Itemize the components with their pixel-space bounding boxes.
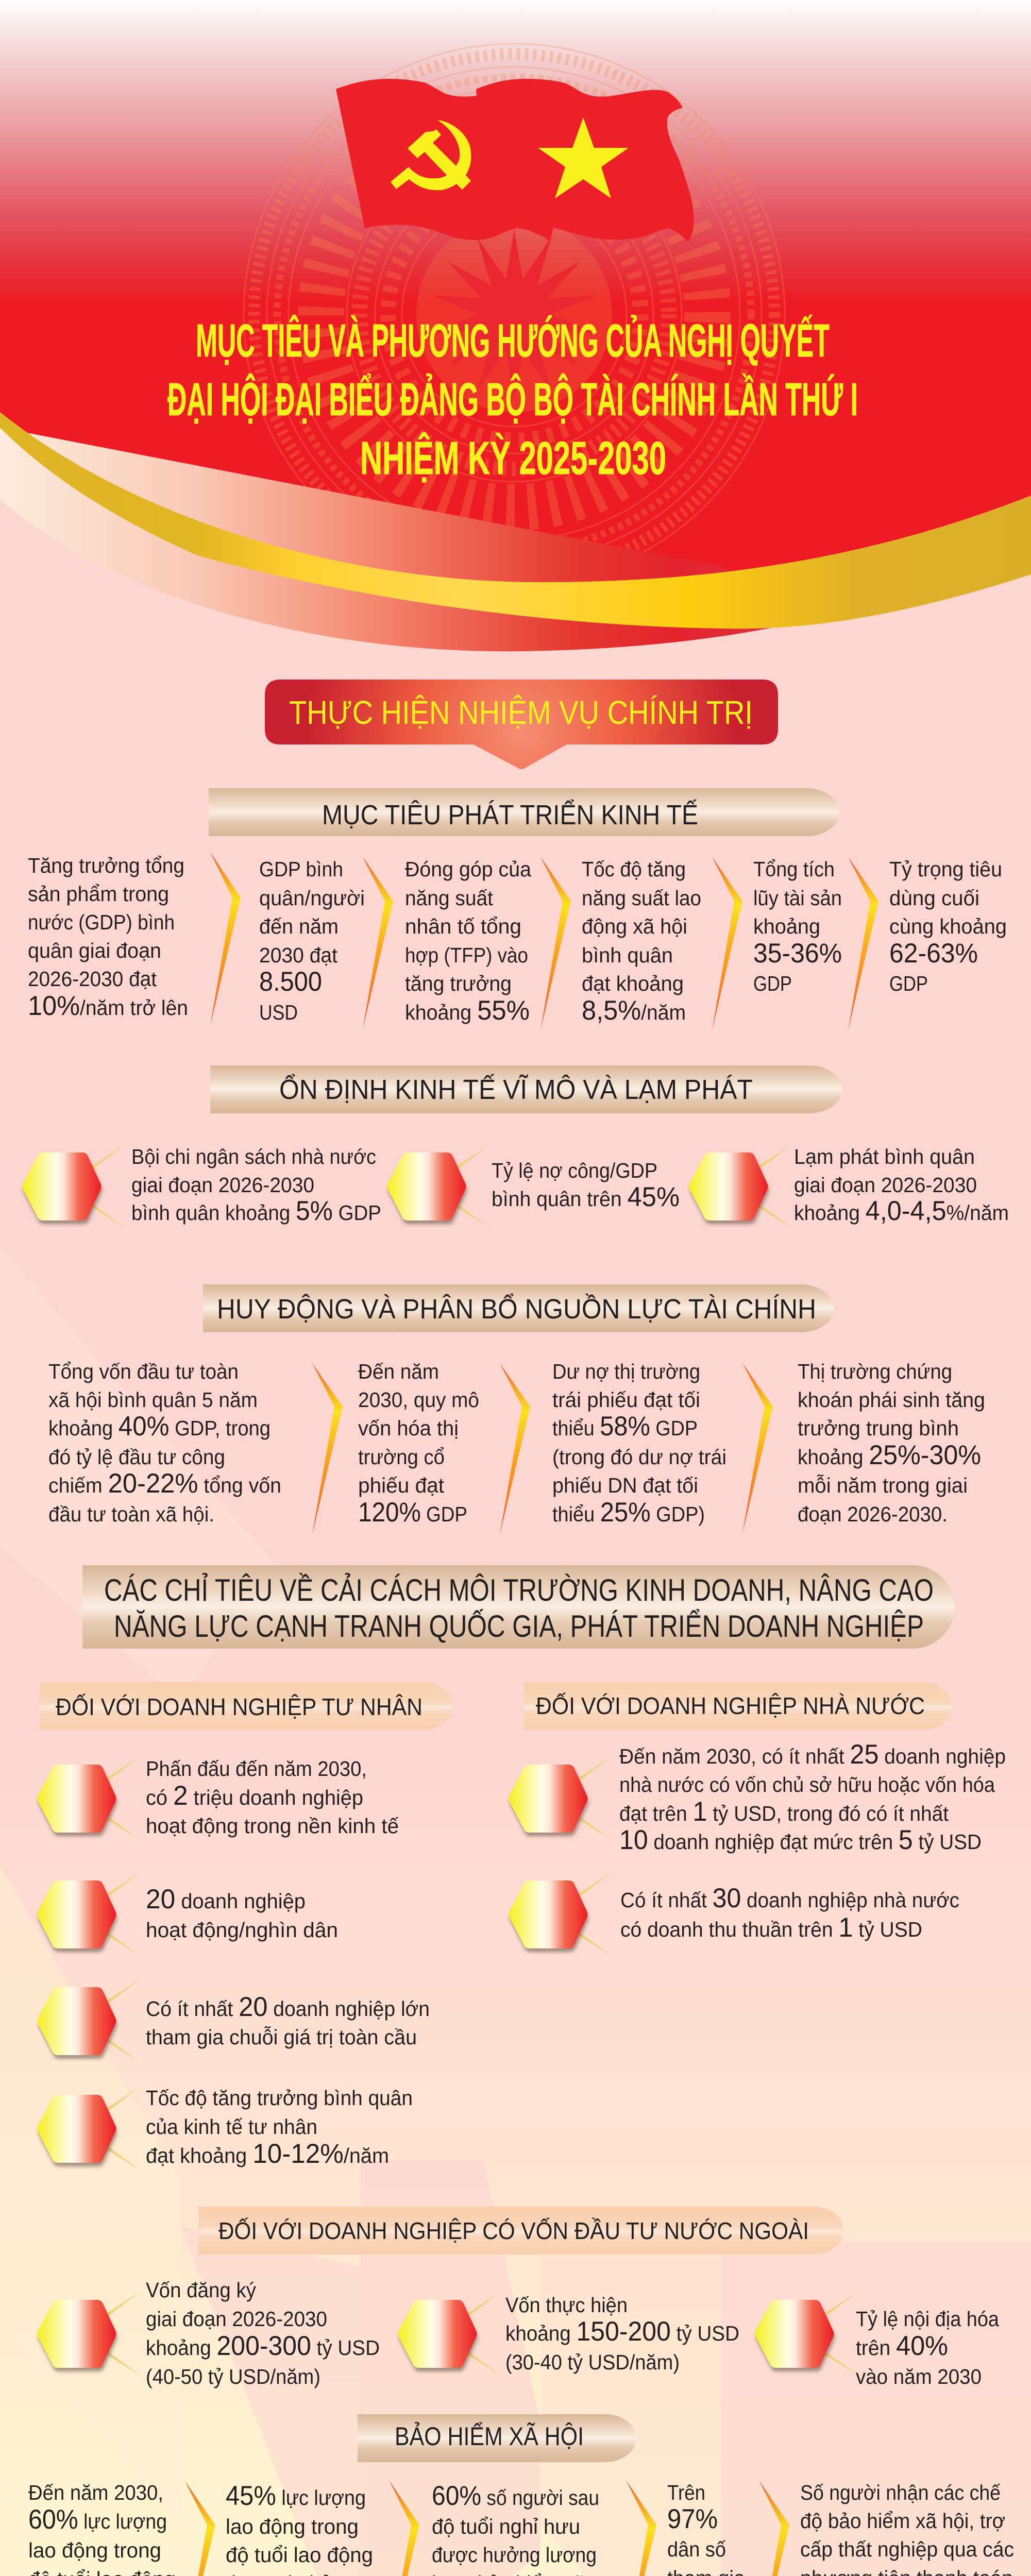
- panel: state enterprises: [509, 1739, 1006, 1956]
- icon: yellow star: [538, 117, 629, 198]
- text: derivatives market: trưởng trung bình: [798, 1416, 959, 1440]
- text: derivatives market: Thị trường chứng: [798, 1360, 952, 1383]
- text: 25 state enterprises: đạt trên 1 tỷ USD, trong đó có ít nhất: [619, 1797, 949, 1827]
- text: total investment: [48, 1360, 281, 1526]
- text: 20 enterprises per thousand: hoạt động/nghìn dân: [146, 1918, 338, 1942]
- text: total investment: đầu tư toàn xã hội.: [48, 1502, 214, 1526]
- text: global value chain: [146, 1992, 430, 2049]
- heading: ổn định kinh tế vĩ mô: [210, 1065, 842, 1113]
- heading: bảo hiểm xã hội: [358, 2414, 636, 2462]
- text: bond market: trái phiếu đạt tối: [552, 1388, 700, 1412]
- icon: hexagon: [23, 1145, 125, 1228]
- panel: private enterprises: [37, 1757, 430, 2170]
- text: GDP per capita: [259, 857, 365, 1024]
- text: stock market cap: 120% GDP: [358, 1497, 467, 1528]
- text: global value chain: tham gia chuỗi giá trị toàn cầu: [146, 2025, 417, 2049]
- text: GDP per capita: 2030 đạt: [259, 943, 338, 967]
- arrow: chevron: [500, 1363, 530, 1535]
- text: unemployment insurance: độ tuổi lao động: [226, 2543, 373, 2567]
- text: private growth rate: [146, 2086, 413, 2169]
- text: cashless payments: độ bảo hiểm xã hội, trợ: [800, 2509, 1005, 2533]
- text: 2 million enterprises: Phấn đấu đến năm 2030,: [146, 1757, 367, 1781]
- text: cashless payments: [800, 2481, 1016, 2576]
- text: final consumption: dùng cuối: [889, 886, 979, 910]
- text: budget deficit: Bội chi ngân sách nhà nước: [131, 1145, 376, 1168]
- text: pension: được hưởng lương: [432, 2543, 597, 2567]
- text: asset accumulation: GDP: [753, 972, 792, 995]
- text: registered capital: (40-50 tỷ USD/năm): [146, 2365, 320, 2388]
- text: cashless payments: cấp thất nghiệp qua các: [800, 2537, 1014, 2561]
- heading: thực hiện nhiệm vụ chính trị: THỰC HIỆN NHIỆM VỤ CHÍNH TRỊ: [289, 694, 753, 731]
- arrow: chevron: [626, 2480, 656, 2576]
- text: localisation rate: vào năm 2030: [856, 2365, 982, 2388]
- text: bond market: phiếu DN đạt tối: [552, 1473, 698, 1497]
- text: GDP per capita: 8.500: [259, 967, 322, 997]
- text: public debt: Tỷ lệ nợ công/GDP: [492, 1159, 657, 1182]
- text: stock market cap: Đến năm: [358, 1360, 439, 1383]
- text: GDP per capita: GDP bình: [259, 857, 343, 881]
- text: health insurance: [667, 2481, 751, 2576]
- text: implemented capital: [505, 2293, 739, 2374]
- heading: thực hiện nhiệm vụ chính trị: [265, 680, 778, 769]
- text: TFP: Đóng góp của: [405, 857, 531, 881]
- heading: đối với doanh nghiệp tư nhân: ĐỐI VỚI DOANH NGHIỆP TƯ NHÂN: [56, 1693, 422, 1720]
- text: private growth rate: Tốc độ tăng trưởng bình quân: [146, 2086, 413, 2110]
- text: inflation: Lạm phát bình quân: [794, 1145, 975, 1168]
- text: labour productivity: động xã hội: [582, 914, 687, 938]
- text: total investment: khoảng 40% GDP, trong: [48, 1411, 271, 1442]
- text: 2 million enterprises: có 2 triệu doanh nghiệp: [146, 1781, 363, 1811]
- text: registered capital: khoảng 200-300 tỷ USD: [146, 2331, 380, 2361]
- text: TFP: khoảng 55%: [405, 995, 530, 1026]
- text: total investment: xã hội bình quân 5 năm: [48, 1388, 258, 1412]
- text: localisation rate: [856, 2307, 999, 2388]
- panel: financial resources: [48, 1360, 985, 1535]
- text: pension: [432, 2481, 615, 2576]
- text: inflation: giai đoạn 2026-2030: [794, 1173, 977, 1197]
- text: 60 percent social insurance: Đến năm 2030,: [28, 2481, 163, 2504]
- text: 25 state enterprises: Đến năm 2030, có ít nhất 25 doanh nghiệp: [619, 1739, 1006, 1770]
- heading: bảo hiểm xã hội: BẢO HIỂM XÃ HỘI: [395, 2422, 584, 2451]
- icon: hexagon: [37, 2087, 140, 2170]
- text: cashless payments: Số người nhận các chế: [800, 2481, 1001, 2504]
- arrow: chevron: [848, 857, 878, 1030]
- text: 60 percent social insurance: 60% lực lượng: [28, 2504, 167, 2535]
- arrow: chevron: [742, 1363, 773, 1533]
- text: GDP growth: nước (GDP) bình: [28, 910, 175, 934]
- arrow: chevron: [712, 857, 742, 1030]
- text: implemented capital: Vốn thực hiện: [505, 2293, 628, 2317]
- icon: hexagon: [387, 1145, 489, 1228]
- text: stock market cap: trường cổ: [358, 1445, 445, 1469]
- icon: hexagon: [509, 1757, 611, 1840]
- heading: mục tiêu phát triển kinh tế: MỤC TIÊU PHÁT TRIỂN KINH TẾ: [322, 800, 698, 831]
- text: asset accumulation: [753, 857, 842, 995]
- icon: hexagon: [755, 2292, 857, 2375]
- text: GDP per capita: USD: [259, 1001, 298, 1024]
- text: stock market cap: 2030, quy mô: [358, 1388, 479, 1412]
- text: bond market: (trong đó dư nợ trái: [552, 1445, 726, 1469]
- text: private growth rate: đạt khoảng 10-12%/năm: [146, 2139, 389, 2169]
- text: 25 state enterprises: nhà nước có vốn chủ sở hữu hoặc vốn hóa: [619, 1773, 995, 1797]
- arrow: chevron: [312, 1363, 343, 1535]
- text: final consumption: cùng khoảng: [889, 914, 1007, 938]
- arrow: chevron: [759, 2480, 789, 2576]
- text: total investment: Tổng vốn đầu tư toàn: [48, 1360, 239, 1383]
- text: stock market cap: phiếu đạt: [358, 1473, 445, 1497]
- text: total investment: chiếm 20-22% tổng vốn: [48, 1468, 281, 1499]
- text: GDP growth: sản phẩm trong: [28, 882, 169, 906]
- heading: mục tiêu phát triển kinh tế: [209, 788, 840, 836]
- text: unemployment insurance: 45% lực lượng: [226, 2481, 366, 2511]
- banner background with red gradient: [0, 0, 1031, 582]
- text: GDP per capita: đến năm: [259, 914, 339, 938]
- text: labour productivity: năng suất lao: [582, 886, 701, 910]
- icon: hexagon: [37, 1873, 140, 1956]
- text: budget deficit: giai đoạn 2026-2030: [131, 1173, 314, 1197]
- text: asset accumulation: Tổng tích: [753, 857, 835, 881]
- arrow: chevron: [210, 852, 241, 1026]
- text: 2 million enterprises: hoạt động trong nền kinh tế: [146, 1814, 399, 1838]
- text: labour productivity: [582, 857, 701, 1026]
- text: health insurance: Trên: [667, 2481, 705, 2504]
- lower ribbon: [0, 428, 824, 651]
- text: global value chain: Có ít nhất 20 doanh nghiệp lớn: [146, 1992, 430, 2022]
- text: budget deficit: bình quân khoảng 5% GDP: [131, 1196, 381, 1226]
- icon: party flag: [336, 79, 694, 242]
- text: total investment: đó tỷ lệ đầu tư công: [48, 1445, 225, 1469]
- text: asset accumulation: khoảng: [753, 914, 820, 938]
- panel: foreign invested enterprises: [37, 2278, 999, 2388]
- text: GDP growth: 2026-2030 đạt: [28, 967, 157, 991]
- text: pension: 60% số người sau: [432, 2481, 599, 2511]
- text: public debt: bình quân trên 45%: [492, 1182, 680, 1212]
- arrow: chevron: [363, 857, 393, 1029]
- text: TFP: năng suất: [405, 886, 494, 910]
- text: TFP: nhân tố tổng: [405, 914, 521, 938]
- text: GDP growth: Tăng trưởng tổng: [28, 854, 184, 877]
- text: budget deficit: [131, 1145, 381, 1226]
- text: bond market: [552, 1360, 726, 1528]
- text: registered capital: giai đoạn 2026-2030: [146, 2307, 327, 2331]
- text: stock market cap: vốn hóa thị: [358, 1416, 459, 1440]
- text: 25 state enterprises: [619, 1739, 1006, 1855]
- text: labour productivity: bình quân: [582, 943, 673, 967]
- heading: doanh nghiệp có vốn đầu tư nước ngoài: [198, 2207, 844, 2255]
- text: 30 state enterprises: có doanh thu thuần trên 1 tỷ USD: [620, 1912, 922, 1943]
- text: 2 million enterprises: [146, 1757, 399, 1838]
- text: implemented capital: (30-40 tỷ USD/năm): [505, 2350, 680, 2374]
- icon: hexagon: [37, 2292, 140, 2375]
- text: TFP: tăng trưởng: [405, 972, 512, 995]
- text: unemployment insurance: lao động trong: [226, 2515, 359, 2538]
- arrow: chevron: [389, 2480, 419, 2576]
- text: GDP growth: [28, 854, 188, 1021]
- panel: macro stability: [23, 1145, 1009, 1228]
- text: derivatives market: mỗi năm trong giai: [798, 1473, 968, 1497]
- text: derivatives market: đoạn 2026-2030.: [798, 1502, 948, 1526]
- text: final consumption: Tỷ trọng tiêu: [889, 857, 1002, 881]
- arrow: chevron: [185, 2481, 215, 2576]
- text: asset accumulation: 35-36%: [753, 938, 842, 969]
- text: 30 state enterprises: [620, 1883, 959, 1943]
- text: 20 enterprises per thousand: 20 doanh nghiệp: [146, 1884, 306, 1914]
- text: registered capital: [146, 2278, 380, 2388]
- icon: hexagon: [398, 2292, 500, 2375]
- icon: hexagon: [689, 1145, 791, 1228]
- text: GDP growth: quân giai đoạn: [28, 939, 161, 962]
- text: health insurance: dân số: [667, 2537, 726, 2561]
- text: 60 percent social insurance: lao động trong: [28, 2538, 161, 2562]
- text: registered capital: Vốn đăng ký: [146, 2278, 256, 2302]
- text: 20 enterprises per thousand: [146, 1884, 338, 1942]
- text: pension: độ tuổi nghỉ hưu: [432, 2515, 580, 2538]
- text: bond market: thiểu 25% GDP): [552, 1497, 705, 1528]
- text: final consumption: [889, 857, 1007, 995]
- text: final consumption: 62-63%: [889, 938, 978, 969]
- text: stock market cap: [358, 1360, 479, 1528]
- heading: đối với doanh nghiệp nhà nước: ĐỐI VỚI DOANH NGHIỆP NHÀ NƯỚC: [536, 1692, 925, 1719]
- text: public debt: [492, 1159, 680, 1212]
- text: labour productivity: Tốc độ tăng: [582, 857, 686, 881]
- text: 30 state enterprises: Có ít nhất 30 doanh nghiệp nhà nước: [620, 1883, 959, 1913]
- text: localisation rate: trên 40%: [856, 2331, 948, 2361]
- text: TFP: hợp (TFP) vào: [405, 943, 528, 967]
- gold ribbon: [0, 412, 1031, 629]
- text: final consumption: GDP: [889, 972, 928, 995]
- heading: huy động và phân bổ nguồn lực: HUY ĐỘNG VÀ PHÂN BỔ NGUỒN LỰC TÀI CHÍNH: [217, 1294, 816, 1325]
- title: NHIỆM KỲ 2025-2030: [360, 432, 666, 484]
- heading: doanh nghiệp có vốn đầu tư nước ngoài: ĐỐI VỚI DOANH NGHIỆP CÓ VỐN ĐẦU TƯ NƯỚC NGOÀI: [218, 2217, 809, 2244]
- text: labour productivity: đạt khoảng: [582, 972, 684, 995]
- heading: huy động và phân bổ nguồn lực: [203, 1284, 834, 1332]
- text: unemployment insurance: [226, 2481, 380, 2576]
- text: bond market: thiểu 58% GDP: [552, 1411, 698, 1442]
- text: private growth rate: của kinh tế tư nhân: [146, 2115, 317, 2139]
- text: 25 state enterprises: 10 doanh nghiệp đạt mức trên 5 tỷ USD: [619, 1825, 982, 1855]
- icon: hexagon: [37, 1979, 140, 2062]
- text: derivatives market: [798, 1360, 985, 1526]
- heading: ổn định kinh tế vĩ mô: ỔN ĐỊNH KINH TẾ VĨ MÔ VÀ LẠM PHÁT: [279, 1074, 753, 1105]
- text: labour productivity: 8,5%/năm: [582, 995, 686, 1026]
- icon: hexagon: [37, 1757, 140, 1840]
- text: localisation rate: Tỷ lệ nội địa hóa: [856, 2307, 999, 2331]
- title: [167, 314, 858, 484]
- text: bond market: Dư nợ thị trường: [552, 1360, 700, 1383]
- text: GDP growth: 10%/năm trở lên: [28, 991, 188, 1021]
- icon: hexagon: [509, 1873, 611, 1956]
- text: asset accumulation: lũy tài sản: [753, 886, 842, 910]
- panel: economic targets: [28, 852, 1007, 1030]
- icon: hammer and sickle: [391, 120, 471, 190]
- heading: đối với doanh nghiệp nhà nước: [523, 1682, 952, 1730]
- text: 60 percent social insurance: [28, 2481, 176, 2576]
- text: derivatives market: khoán phái sinh tăng: [798, 1388, 985, 1412]
- text: GDP per capita: quân/người: [259, 886, 365, 910]
- heading: đối với doanh nghiệp tư nhân: [40, 1682, 452, 1730]
- text: implemented capital: khoảng 150-200 tỷ USD: [505, 2316, 739, 2347]
- panel: social insurance: [28, 2480, 1016, 2576]
- heading: các chỉ tiêu về cải cách: [82, 1565, 955, 1649]
- arrow: chevron: [540, 857, 571, 1030]
- text: inflation: khoảng 4,0-4,5%/năm: [794, 1196, 1009, 1226]
- text: derivatives market: khoảng 25%-30%: [798, 1440, 981, 1470]
- bronze drum pattern: [244, 44, 785, 585]
- text: health insurance: 97%: [667, 2504, 718, 2534]
- text: TFP: [405, 857, 531, 1026]
- text: inflation: [794, 1145, 1009, 1226]
